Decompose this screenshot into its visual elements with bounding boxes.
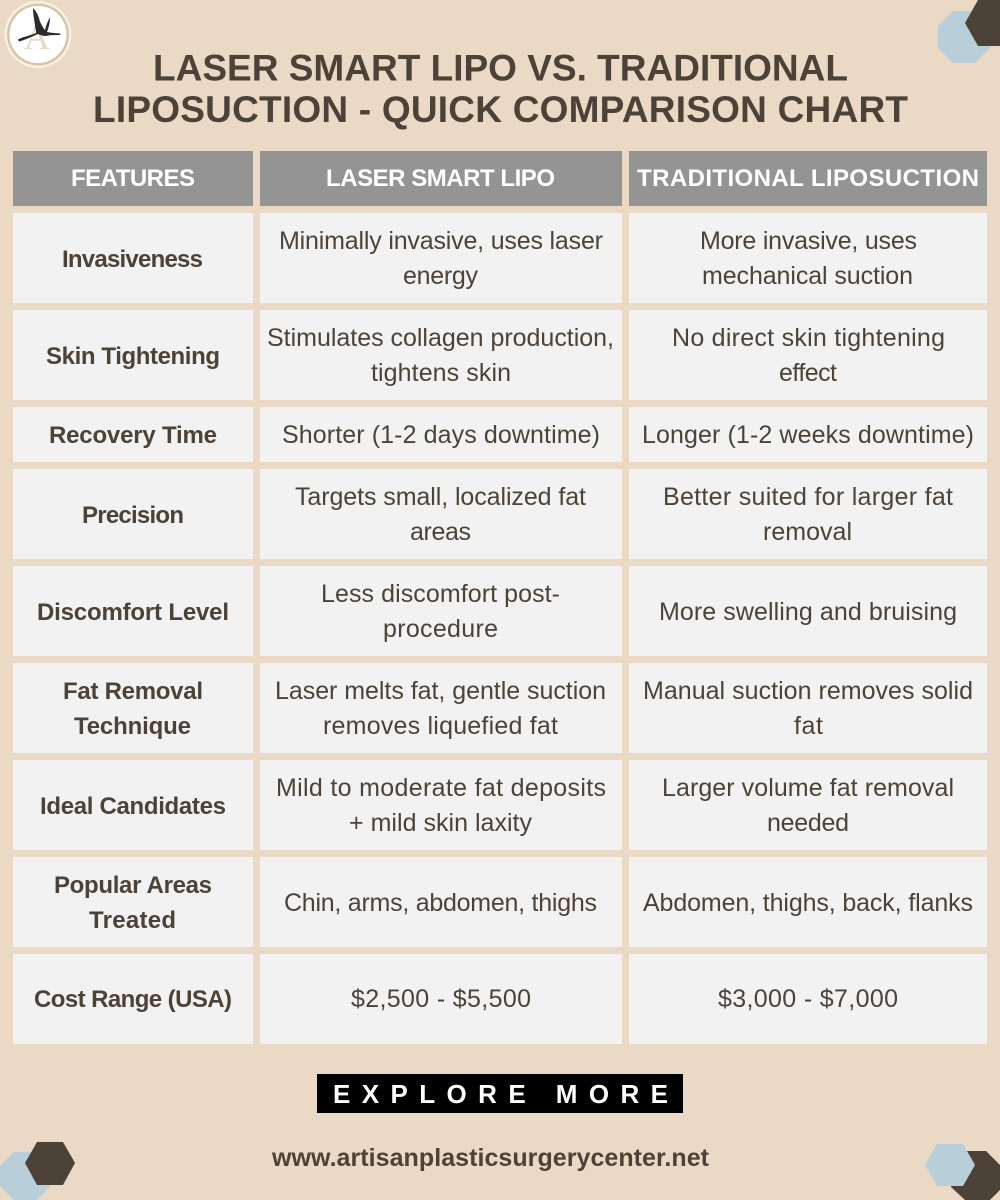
row: ideal candidates: needed — [767, 809, 849, 837]
row: popular areas treated — [13, 857, 987, 947]
row: precision: Precision — [82, 502, 184, 529]
header: features — [13, 151, 253, 206]
row: recovery time: Longer (1-2 weeks downtime) — [642, 421, 974, 449]
decoration: bottom left hexagons — [0, 1142, 75, 1200]
row: invasiveness: More invasive, uses — [700, 227, 917, 255]
button: explore more: EXPLORE MORE — [333, 1079, 668, 1109]
row: discomfort level: Discomfort Level — [37, 599, 229, 626]
row: recovery time: Recovery Time — [49, 422, 217, 449]
row: ideal candidates: Larger volume fat removal — [662, 774, 954, 802]
row: skin tightening: tightens skin — [371, 359, 511, 387]
website url: www.artisanplasticsurgerycenter.net — [271, 1144, 710, 1172]
row: cost range: Cost Range (USA) — [34, 986, 232, 1013]
row: discomfort level: More swelling and bruising — [659, 598, 957, 626]
logo: bird over letter A: A — [24, 17, 50, 57]
row: discomfort level — [13, 566, 987, 656]
decoration: bottom right hexagons — [925, 1144, 1000, 1200]
title — [93, 48, 908, 130]
row: recovery time: Shorter (1-2 days downtime) — [282, 421, 600, 449]
row: invasiveness: mechanical suction — [702, 262, 913, 290]
row: popular areas treated: Treated — [89, 907, 176, 934]
row: cost range — [13, 954, 987, 1044]
title: LIPOSUCTION - QUICK COMPARISON CHART — [93, 89, 908, 130]
header: laser smart lipo: LASER SMART LIPO — [326, 165, 555, 192]
row: ideal candidates: + mild skin laxity — [349, 809, 532, 837]
logo: bird over letter A — [4, 1, 72, 68]
row: skin tightening: effect — [779, 359, 837, 387]
row: ideal candidates: Ideal Candidates — [40, 793, 226, 820]
row: skin tightening — [13, 310, 987, 400]
header: traditional liposuction: TRADITIONAL LIPOSUCTION — [637, 165, 979, 192]
row: cost range: $2,500 - $5,500 — [351, 985, 531, 1013]
row: invasiveness: energy — [403, 262, 478, 290]
row: recovery time — [13, 407, 987, 462]
row: fat removal technique: Fat Removal — [63, 678, 203, 705]
row: ideal candidates — [13, 760, 987, 850]
row: precision: Better suited for larger fat — [663, 483, 953, 511]
row: ideal candidates: Mild to moderate fat deposits — [276, 774, 606, 802]
row: skin tightening: No direct skin tightening — [672, 324, 945, 352]
row: popular areas treated: Abdomen, thighs, back, flanks — [643, 889, 973, 917]
row: fat removal technique: Manual suction removes solid — [643, 677, 973, 705]
row: fat removal technique — [13, 663, 987, 753]
row: fat removal technique: Laser melts fat, gentle suction — [275, 677, 606, 705]
row: invasiveness: Minimally invasive, uses laser — [279, 227, 603, 255]
row: invasiveness: Invasiveness — [62, 246, 203, 273]
header: features: FEATURES — [71, 165, 195, 192]
header: laser smart lipo — [260, 151, 622, 206]
row: skin tightening: Skin Tightening — [46, 343, 220, 370]
row: precision — [13, 469, 987, 559]
row: fat removal technique: Technique — [74, 713, 191, 740]
table header row — [13, 151, 987, 206]
title: LASER SMART LIPO VS. TRADITIONAL — [153, 48, 848, 88]
row: fat removal technique: removes liquefied fat — [323, 712, 558, 740]
row: cost range: $3,000 - $7,000 — [718, 985, 898, 1013]
row: precision: areas — [410, 518, 471, 546]
row: invasiveness — [13, 213, 987, 303]
row: popular areas treated: Chin, arms, abdomen, thighs — [284, 889, 597, 917]
row: precision: Targets small, localized fat — [295, 483, 586, 511]
row: skin tightening: Stimulates collagen production, — [267, 324, 614, 352]
decoration: top right hexagons — [938, 0, 1000, 63]
row: precision: removal — [763, 518, 852, 546]
row: fat removal technique: fat — [794, 712, 823, 740]
row: popular areas treated: Popular Areas — [54, 872, 212, 899]
row: discomfort level: Less discomfort post- — [321, 580, 560, 608]
header: traditional liposuction — [629, 151, 987, 206]
row: discomfort level: procedure — [383, 615, 498, 643]
